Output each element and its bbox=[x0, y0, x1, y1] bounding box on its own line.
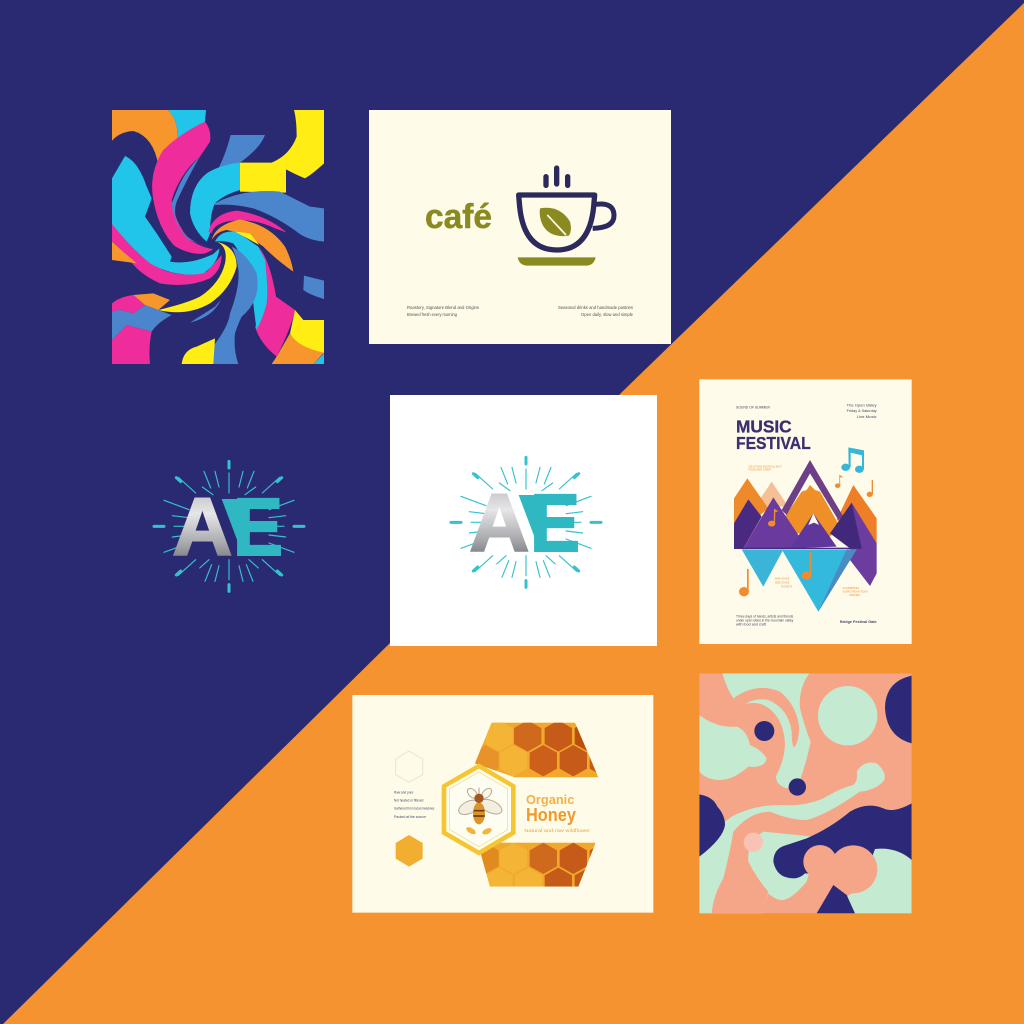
cafe fine print right: Open daily, slow and simple bbox=[581, 312, 634, 317]
filled gold hexagon bbox=[396, 835, 423, 867]
honeycomb top band bbox=[475, 722, 598, 778]
logo: AE on navy: A bbox=[172, 482, 232, 573]
icon: orange music notes bbox=[739, 475, 873, 596]
cafe fine print right: Seasonal drinks and handmade pastries bbox=[558, 305, 633, 310]
poster orange captions: FOOD AND CRAFT bbox=[748, 468, 772, 472]
poster title: MUSIC bbox=[736, 417, 792, 437]
panel: organic blobs bbox=[699, 673, 912, 913]
cafe fine print left bbox=[407, 305, 479, 317]
cafe fine print right bbox=[558, 305, 634, 317]
label side text: Packed at the source bbox=[394, 814, 427, 819]
logo: AE on navy: E bbox=[233, 482, 283, 573]
poster bottom text: Bridge Festival Gate bbox=[840, 620, 877, 624]
panel: white AE logo card bbox=[390, 395, 657, 646]
poster bottom text: Three days of bands, artists and friends bbox=[736, 615, 794, 619]
poster orange captions: SIDE STAGE bbox=[775, 580, 790, 584]
cafe wordmark: café bbox=[425, 198, 492, 236]
panel: cafe card bbox=[369, 110, 671, 344]
poster mountains bbox=[734, 460, 877, 612]
poster title: FESTIVAL bbox=[736, 433, 811, 453]
panel: organic honey label bbox=[352, 695, 653, 913]
poster top small text: Friday & Saturday bbox=[847, 409, 877, 413]
poster bottom text: with food and craft bbox=[736, 623, 766, 627]
poster title bbox=[736, 417, 811, 453]
label side text: Raw and pure bbox=[394, 790, 414, 795]
poster orange captions: LIVE ACTS AND DANCING ALL NIGHT bbox=[748, 464, 782, 468]
icon: bee bbox=[456, 786, 504, 836]
panel: colorful swirl bbox=[112, 110, 324, 364]
organic honey heading: Organic bbox=[526, 792, 575, 807]
poster bottom text bbox=[736, 615, 877, 627]
honey tagline: Natural and raw wildflower bbox=[524, 828, 591, 833]
hexagon outline decoration bbox=[396, 751, 423, 782]
poster orange captions: DOORS OPEN AT NOON bbox=[843, 589, 868, 593]
logo: AE on white: A bbox=[469, 478, 529, 569]
honeycomb bottom band bbox=[481, 842, 596, 887]
cafe fine print left: Roastery, Signature Blend and Origins bbox=[407, 305, 479, 310]
label side text bbox=[394, 790, 434, 819]
label side text: Not heated or filtered bbox=[394, 797, 423, 802]
panel: music festival poster bbox=[699, 379, 912, 644]
cafe fine print left: Brewed fresh every morning bbox=[407, 312, 458, 317]
poster orange captions: PARKING bbox=[849, 593, 860, 597]
poster top small text: SOUND OF SUMMER bbox=[736, 406, 770, 410]
logo: AE on white: E bbox=[530, 478, 580, 569]
icon: coffee cup with leaf bbox=[518, 168, 614, 266]
poster orange captions bbox=[748, 464, 868, 597]
organic honey heading: Honey bbox=[526, 804, 577, 825]
logo: AE on white bbox=[451, 457, 601, 587]
central bee hexagon bbox=[442, 763, 516, 856]
label side text: Gathered from local meadows bbox=[394, 806, 434, 811]
poster orange captions: TICKETS bbox=[781, 585, 793, 589]
logo: AE on navy bbox=[154, 461, 304, 591]
icon: blue music notes bbox=[841, 447, 864, 473]
organic honey heading bbox=[526, 792, 577, 825]
poster orange captions: CAMPING bbox=[843, 586, 859, 590]
poster orange captions: MAIN STAGE bbox=[775, 576, 790, 580]
poster top small text bbox=[736, 403, 877, 419]
poster top small text: The Open Valley bbox=[847, 403, 877, 407]
poster bottom text: under open skies in the mountain valley bbox=[736, 619, 794, 623]
poster top small text: Live Music bbox=[857, 415, 877, 419]
